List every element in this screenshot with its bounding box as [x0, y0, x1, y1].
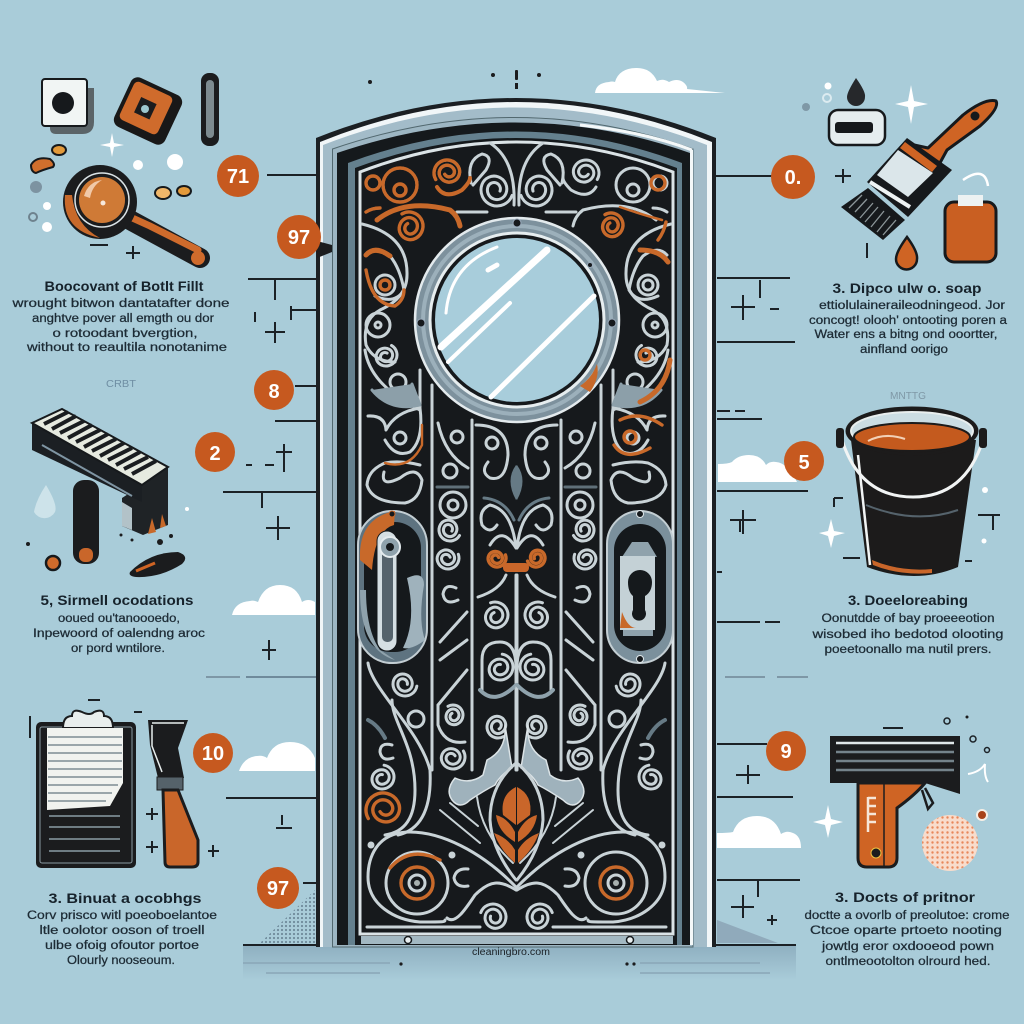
icon: block, rust ring, slot: [42, 73, 219, 147]
lower scrolls: [368, 663, 430, 835]
watermark: cleaningbro.com: [472, 947, 550, 958]
text block: top left: [11, 278, 229, 354]
badge 9: [766, 731, 806, 771]
bottom rail: [361, 936, 673, 944]
head: [830, 736, 960, 794]
text block: bottom left: [27, 890, 217, 967]
text block: top left: Boocovant of Botlt Fillt: [44, 278, 204, 294]
specks: [26, 534, 173, 546]
small marks: [835, 169, 867, 258]
text block: middle right: wisobed iho bedotod olooting: [811, 629, 1004, 641]
text block: top right: [809, 280, 1008, 356]
text block: bottom left: Corv prisco witl poeoboelantoe: [27, 910, 217, 922]
hole: [871, 848, 881, 858]
tick: [30, 700, 142, 738]
text block: bottom right: [804, 889, 1010, 968]
frame steel band: [323, 108, 707, 947]
frame inner band: [332, 118, 693, 947]
caption: small label left: CRBT: [106, 379, 136, 390]
lever: [377, 531, 397, 651]
badge 71: 71: [227, 166, 249, 188]
handle: [842, 440, 983, 497]
rust ring: [111, 75, 185, 147]
column three: [486, 437, 498, 449]
wedge: [403, 575, 425, 648]
badge 71: [217, 155, 259, 197]
badge 8: [254, 370, 294, 410]
rust patch: [580, 364, 598, 392]
column two: [451, 431, 463, 443]
fleur: [481, 505, 516, 548]
handle: [130, 220, 200, 258]
clouds: [232, 68, 801, 848]
text block: bottom left: Olourly nooseoum.: [67, 955, 175, 967]
text block: top right: ainfland oorigo: [860, 344, 948, 356]
comb: [868, 797, 876, 832]
plus marks: [146, 808, 219, 857]
text block: middle right: poeetoonallo ma nutil prers.: [824, 644, 992, 656]
badge 5: [784, 441, 824, 481]
leaf: [494, 787, 539, 863]
curl: [963, 174, 988, 186]
badge 9: 9: [780, 741, 792, 763]
shadow triangle right: [717, 920, 778, 943]
liquid: [854, 423, 970, 451]
orange base: [872, 560, 932, 574]
badge 97 bottom: 97: [267, 878, 289, 900]
badge 97 top: 97: [288, 227, 310, 249]
splashes and dots left: [29, 133, 191, 259]
rust accents: [360, 155, 670, 899]
text block: bottom right: 3. Docts of pritnor: [835, 889, 976, 905]
right white stripe: [690, 150, 693, 945]
body: [851, 440, 976, 576]
text block: top left: o rotoodant bvergtion,: [52, 328, 198, 340]
icon: bench brush: [26, 409, 189, 577]
ring: [46, 556, 60, 570]
door core: [355, 138, 677, 945]
sponge: [922, 815, 978, 871]
rivet: [389, 511, 395, 517]
icon: scraper: [146, 720, 219, 867]
star: [813, 805, 843, 838]
ring outer: [415, 218, 619, 422]
rail rivets: [404, 936, 634, 944]
badge 97 top: [277, 215, 321, 259]
blade: [148, 720, 188, 778]
icon: bucket: [819, 408, 1000, 576]
handle: [858, 783, 925, 867]
brush handle: [905, 101, 997, 172]
ornament right half: [512, 143, 671, 931]
ring mid light: [423, 226, 611, 414]
dark lens: [130, 552, 185, 577]
number badges: [193, 155, 824, 909]
text block: top right: Water ens a bitng ond ooortter,: [814, 329, 998, 341]
text block: bottom right: doctte a ovorlb of preolutoe: crome: [804, 910, 1010, 922]
drop: [847, 78, 865, 106]
badge 0: 0.: [785, 167, 801, 189]
door inner panel: [360, 142, 673, 944]
collar: [157, 777, 183, 790]
badge 10: [193, 733, 233, 773]
white seam: [858, 455, 870, 565]
glass: [435, 238, 599, 402]
text block: middle right: 3. Doeeloreabing: [848, 592, 968, 608]
text block: top left: wrought bitwon dantatafter done: [11, 298, 229, 310]
loop: [922, 788, 933, 809]
block: [42, 79, 87, 126]
paper: [47, 728, 123, 810]
right core backing: [682, 165, 690, 945]
floor lines: [243, 963, 770, 973]
door slab: [337, 122, 690, 945]
end block: [122, 467, 168, 535]
badge 10: 10: [202, 743, 224, 765]
lens: [63, 165, 137, 239]
floor dots: [399, 962, 636, 966]
top marks: [368, 70, 541, 89]
text block: top right: ettiolulaineraileodningeod. Jor: [819, 300, 1005, 312]
stippled steel arch and stile: [348, 132, 682, 945]
gray flare: [449, 725, 512, 805]
bristle top: [32, 409, 168, 485]
base line: [367, 926, 666, 928]
leader lines and plus marks right: [700, 176, 808, 945]
orange drop: [896, 237, 917, 270]
door frame: [316, 98, 716, 947]
badge 5: 5: [798, 452, 810, 474]
gray cheek: [360, 590, 395, 660]
badge 97 bottom: [257, 867, 299, 909]
caption: small label right: MNTTG: [890, 391, 926, 402]
text block: top left: without to reaultila nonotanime: [26, 342, 227, 354]
clip: [63, 711, 113, 728]
text block: middle right: Oonutdde of bay proeeeotion: [822, 613, 994, 625]
porthole window: [415, 218, 619, 422]
ornament left half: [362, 143, 522, 931]
handle plate: [358, 511, 427, 663]
ring highlight: [430, 233, 604, 407]
foot curl: [368, 832, 516, 922]
leader lines and plus marks left: [206, 175, 316, 945]
bands: [866, 505, 958, 516]
text block: top right: concogt! olooh' ontooting poren a: [809, 315, 1008, 327]
frame white edge: [320, 102, 712, 947]
keyhole plate: [607, 510, 673, 663]
icon: roller: [813, 716, 990, 871]
text block: middle left: or pord wntilore.: [71, 643, 165, 655]
center rust bar: [503, 563, 529, 572]
badge 2: [195, 432, 235, 472]
side scrolls: [362, 224, 407, 362]
slot: [201, 73, 219, 146]
text block: bottom right: jowtlg eror oxdooeod pown: [821, 941, 994, 953]
rim: [847, 408, 977, 454]
bits: [977, 810, 987, 820]
verticals: [432, 385, 472, 770]
icon: tray, brush, bottle: [802, 78, 997, 270]
text block: middle left: Inpewoord of oalendng aroc: [33, 628, 205, 640]
grip: [163, 790, 198, 867]
floor shadow: [243, 946, 796, 980]
heart loops: [482, 642, 516, 690]
brush ferrule: [867, 138, 952, 217]
tray: [829, 110, 885, 145]
text block: middle left: [33, 592, 205, 655]
knob: [380, 537, 400, 557]
text block: bottom right: ontlmeootolton olrourd hed.: [826, 956, 990, 968]
block shadow: [50, 88, 94, 134]
badge 0: [771, 155, 815, 199]
star and marks: [819, 519, 845, 548]
front face: [32, 423, 142, 502]
text block: top left: anghtve pover all emgth ou dor: [32, 313, 214, 325]
bristles: [841, 188, 905, 240]
bottle: [945, 202, 996, 262]
star: [895, 85, 928, 124]
top band: [366, 176, 380, 190]
icon: clipboard: [30, 700, 142, 868]
badge 8: 8: [268, 381, 280, 403]
stem: [73, 480, 99, 564]
frame outline: [316, 98, 716, 947]
board: [36, 722, 136, 868]
text block: middle left: ooued ou'tanoooedo,: [58, 613, 180, 625]
text block: bottom left: 3. Binuat a ocobhgs: [48, 890, 202, 906]
teardrop: [490, 763, 516, 880]
white arc highlight: [580, 125, 692, 150]
glass reflections: [441, 247, 594, 397]
text lines: [49, 816, 120, 851]
inner border: [360, 142, 673, 934]
wedge behind badge 97: [317, 241, 332, 258]
text block: top right: 3. Dipco ulw o. soap: [832, 280, 982, 296]
orange wear: [360, 511, 395, 570]
rivets: [417, 219, 616, 327]
center rosettes: [414, 880, 619, 886]
icon: magnifier: [63, 165, 205, 265]
text block: middle right: [811, 592, 1004, 656]
door handle: [358, 511, 427, 663]
text block: middle left: 5, Sirmell ocodations: [40, 592, 194, 608]
badge 2: 2: [209, 443, 221, 465]
text block: bottom right: Ctcoe oparte prtoeto nooting: [810, 925, 1002, 937]
halftone triangle left: [260, 890, 315, 943]
text block: bottom left: ulbe ofoig ofoutor portoe: [45, 940, 199, 952]
text block: bottom left: ltle oolotor ooson of troell: [40, 925, 204, 937]
water drop: [34, 485, 56, 518]
